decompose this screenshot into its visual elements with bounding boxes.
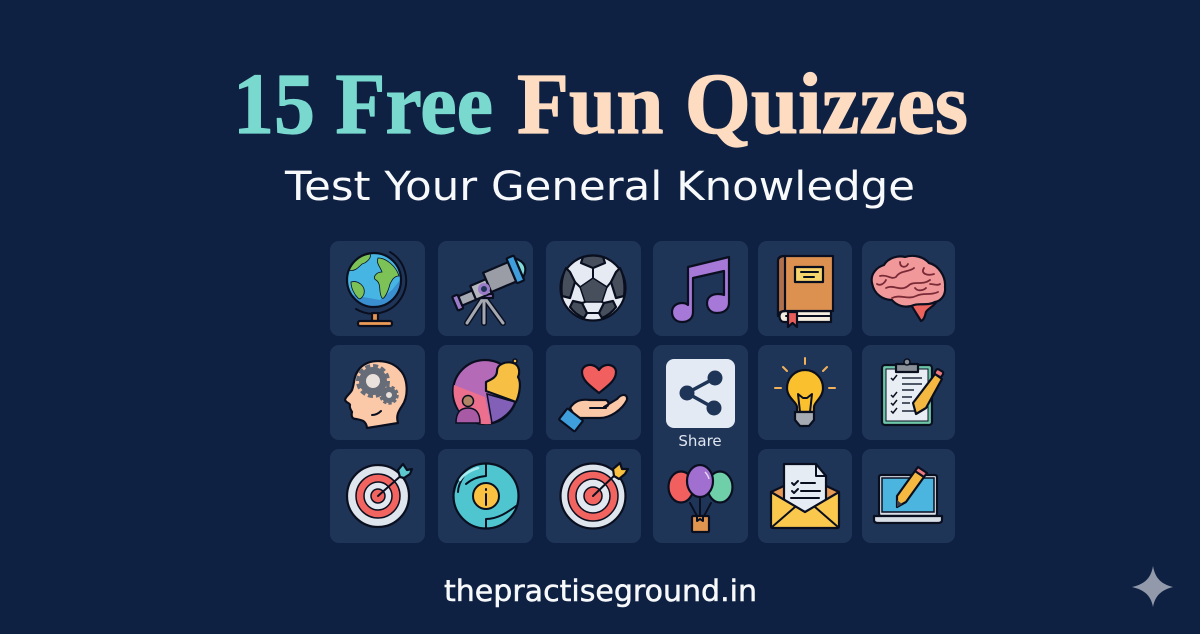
icon: hand with heart bbox=[559, 365, 627, 432]
card: telescope bbox=[438, 241, 533, 336]
icon: telescope bbox=[447, 253, 531, 323]
icon: laptop bbox=[874, 467, 942, 523]
icon: globe bbox=[347, 252, 406, 326]
title part: 15 Free: 15 Free bbox=[233, 55, 493, 152]
card: share and balloons bbox=[653, 345, 748, 543]
icon: head with gears bbox=[345, 361, 407, 428]
icon: pie with dome bbox=[453, 359, 520, 424]
card: envelope bbox=[758, 449, 852, 543]
icon grid bbox=[330, 241, 955, 543]
icon: lightbulb bbox=[775, 358, 835, 426]
card: pie with dome bbox=[438, 345, 533, 440]
share label: Share bbox=[678, 432, 722, 450]
card: soccer ball bbox=[546, 241, 641, 336]
icon: target yellow bbox=[560, 463, 628, 528]
card: target teal bbox=[330, 449, 425, 543]
card: globe bbox=[330, 241, 425, 336]
icon: balloons bbox=[668, 465, 732, 532]
website footer: thepractiseground.in bbox=[444, 574, 757, 608]
icon: target teal bbox=[347, 464, 412, 527]
card: music note bbox=[653, 241, 748, 336]
card: info circle bbox=[438, 449, 533, 543]
card: hand with heart bbox=[546, 345, 641, 440]
icon: music note bbox=[672, 257, 729, 322]
card: target yellow bbox=[546, 449, 641, 543]
icon: soccer ball bbox=[560, 256, 626, 320]
card: brain bbox=[862, 241, 955, 336]
icon: envelope bbox=[771, 464, 839, 528]
subtitle: Test Your General Knowledge bbox=[284, 164, 915, 210]
card: lightbulb bbox=[758, 345, 852, 440]
icon: info circle bbox=[454, 464, 518, 528]
icon: brain bbox=[872, 256, 945, 321]
card: clipboard bbox=[862, 345, 955, 440]
card: laptop bbox=[862, 449, 955, 543]
icon: book bbox=[778, 256, 833, 327]
card: head with gears bbox=[330, 345, 425, 440]
icon: clipboard bbox=[882, 359, 944, 425]
title part: Fun Quizzes: Fun Quizzes bbox=[517, 55, 968, 152]
card: book bbox=[758, 241, 852, 336]
icon: share bbox=[666, 359, 735, 428]
icon: sparkle bbox=[1132, 566, 1173, 607]
title bbox=[233, 55, 968, 152]
